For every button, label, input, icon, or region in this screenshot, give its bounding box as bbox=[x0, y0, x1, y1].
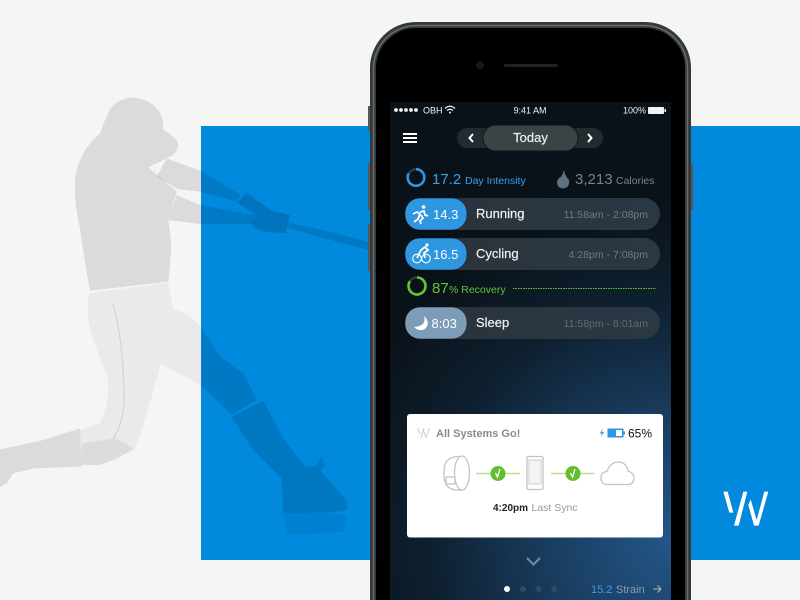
today pill bbox=[483, 125, 578, 151]
activity row: sleep: 11:58pm - 8:01am bbox=[564, 318, 648, 330]
date navigation: Today bbox=[513, 130, 548, 145]
phone body bbox=[370, 22, 691, 600]
activity row: running: 14.3 bbox=[433, 207, 458, 222]
phone hardware buttons bbox=[368, 106, 693, 271]
phone speaker bbox=[504, 64, 558, 67]
activity row: sleep bbox=[405, 307, 660, 339]
lower arm bbox=[168, 195, 254, 224]
activity row: cycling: 16.5 bbox=[433, 247, 458, 262]
front sock and cleat bbox=[232, 401, 347, 513]
helmet and torso bbox=[75, 97, 178, 291]
next page link: strain bbox=[591, 584, 661, 596]
front knee shade bbox=[202, 330, 257, 415]
icon: cloud bbox=[601, 462, 634, 484]
next page link: strain: 15.2 bbox=[591, 584, 612, 596]
activity row: running bbox=[405, 198, 660, 230]
date navigation bbox=[457, 125, 603, 151]
day intensity metric bbox=[408, 169, 526, 188]
menu icon bbox=[403, 133, 417, 143]
icon: runner bbox=[413, 205, 428, 224]
last sync time: 4:20pm bbox=[493, 503, 528, 514]
icon: wristband bbox=[444, 456, 470, 490]
activity row: sleep: 8:03 bbox=[432, 316, 457, 331]
activity row: running: Running bbox=[476, 206, 524, 221]
status bar bbox=[394, 106, 666, 116]
upper arm bbox=[157, 158, 241, 202]
cleat shadow bbox=[283, 511, 347, 535]
sync connector: phone to cloud bbox=[551, 466, 594, 481]
activity row: cycling: Cycling bbox=[476, 246, 519, 261]
sync status card: Last Sync bbox=[532, 502, 578, 514]
icon: phone bbox=[527, 456, 543, 490]
icon: flame bbox=[557, 170, 569, 188]
day intensity metric: 17.2 bbox=[432, 171, 461, 188]
recovery metric: % Recovery bbox=[449, 284, 506, 296]
icon: battery bbox=[608, 429, 625, 437]
status bar: 100% bbox=[623, 106, 646, 116]
status bar: 9:41 AM bbox=[513, 106, 547, 116]
gloves bbox=[237, 193, 290, 233]
previous arrow bbox=[470, 134, 473, 142]
card logo bbox=[418, 428, 430, 438]
arrow bbox=[653, 586, 661, 592]
calories metric: 3,213 bbox=[575, 171, 613, 188]
activity row: cycling: 4:28pm - 7:08pm bbox=[569, 249, 648, 261]
page dots bbox=[504, 586, 557, 592]
calories metric: Calories bbox=[616, 175, 655, 187]
bat bbox=[288, 223, 368, 250]
icon: charging bolt bbox=[600, 428, 604, 438]
activity row: running: 11:58am - 2:08pm bbox=[564, 209, 648, 221]
rear sock bbox=[0, 428, 82, 487]
rear knee bbox=[82, 438, 133, 465]
calories metric bbox=[557, 170, 655, 188]
icon: cyclist bbox=[413, 243, 430, 263]
sync status card: 65% bbox=[628, 426, 652, 440]
next arrow bbox=[588, 134, 592, 142]
phone camera bbox=[476, 61, 484, 69]
baseball player silhouette bbox=[0, 97, 368, 535]
next page link: strain: Strain bbox=[616, 584, 645, 596]
recovery metric bbox=[408, 277, 656, 297]
expand chevron bbox=[527, 558, 540, 564]
status bar: OBH bbox=[423, 106, 443, 116]
activity row: sleep: Sleep bbox=[476, 315, 509, 330]
pants bbox=[80, 283, 257, 465]
card title: All Systems Go! bbox=[436, 428, 520, 440]
day intensity metric: Day Intensity bbox=[465, 175, 526, 187]
blue panel bbox=[201, 126, 800, 560]
recovery metric: 87 bbox=[432, 280, 449, 297]
activity row: cycling bbox=[405, 238, 660, 270]
brand logo bbox=[723, 492, 768, 526]
sync status card bbox=[407, 414, 663, 538]
pants stripe bbox=[113, 303, 124, 438]
icon: moon bbox=[414, 316, 428, 330]
app screen bbox=[390, 102, 671, 600]
sync connector: band to phone bbox=[476, 466, 520, 481]
